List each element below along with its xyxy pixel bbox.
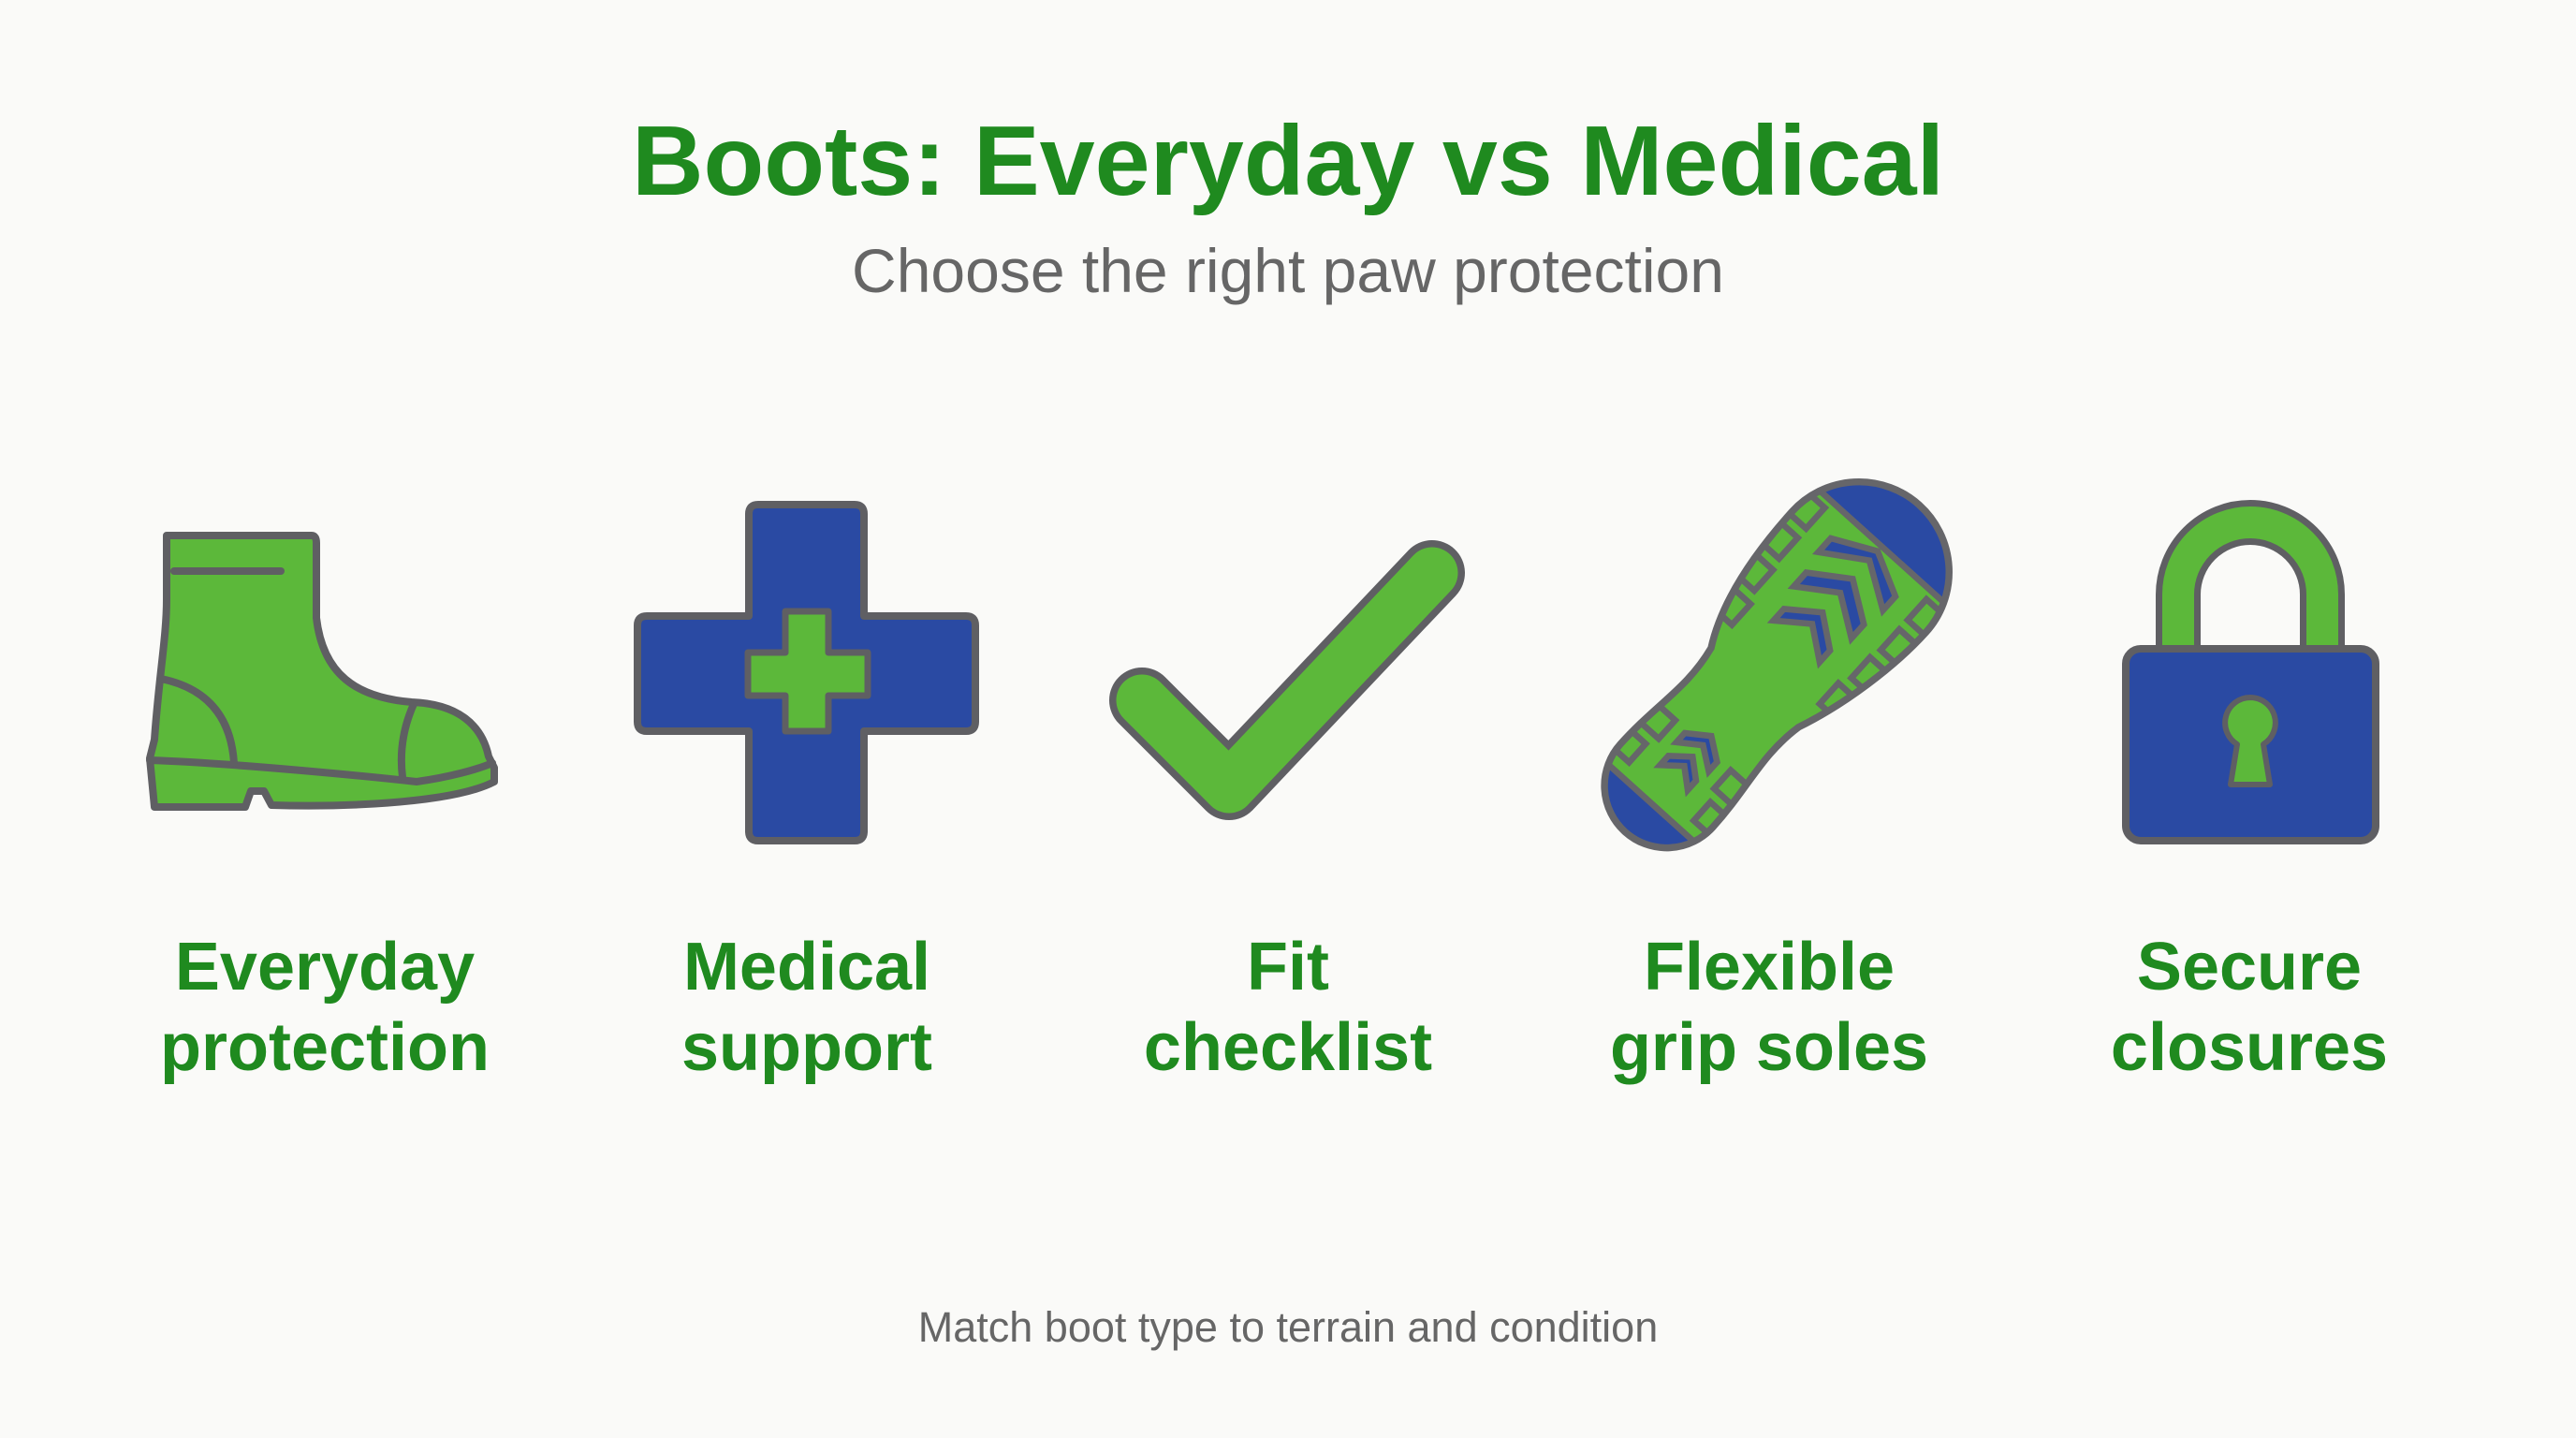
labels (160, 930, 2388, 1085)
label: everyday protection: protection (160, 1010, 490, 1085)
icon: boot (150, 536, 494, 807)
label: medical support: Medical (683, 930, 930, 1005)
footer note: Match boot type to terrain and condition (918, 1303, 1658, 1351)
label: fit checklist: Fit (1247, 930, 1329, 1005)
label: secure closures: closures (2111, 1010, 2388, 1085)
icon: grip sole (1601, 478, 1953, 852)
label: flexible grip soles: Flexible (1644, 930, 1895, 1005)
title: Boots: Everyday vs Medical (632, 106, 1944, 216)
label: medical support: support (681, 1010, 932, 1085)
label: secure closures: Secure (2137, 930, 2362, 1005)
subtitle: Choose the right paw protection (852, 236, 1724, 305)
icon: padlock (2126, 522, 2376, 841)
label: flexible grip soles: grip soles (1610, 1010, 1928, 1085)
icon: checkmark (1142, 573, 1432, 787)
icon: medical cross (637, 505, 975, 841)
label: everyday protection: Everyday (175, 930, 475, 1005)
label: fit checklist: checklist (1144, 1010, 1432, 1085)
